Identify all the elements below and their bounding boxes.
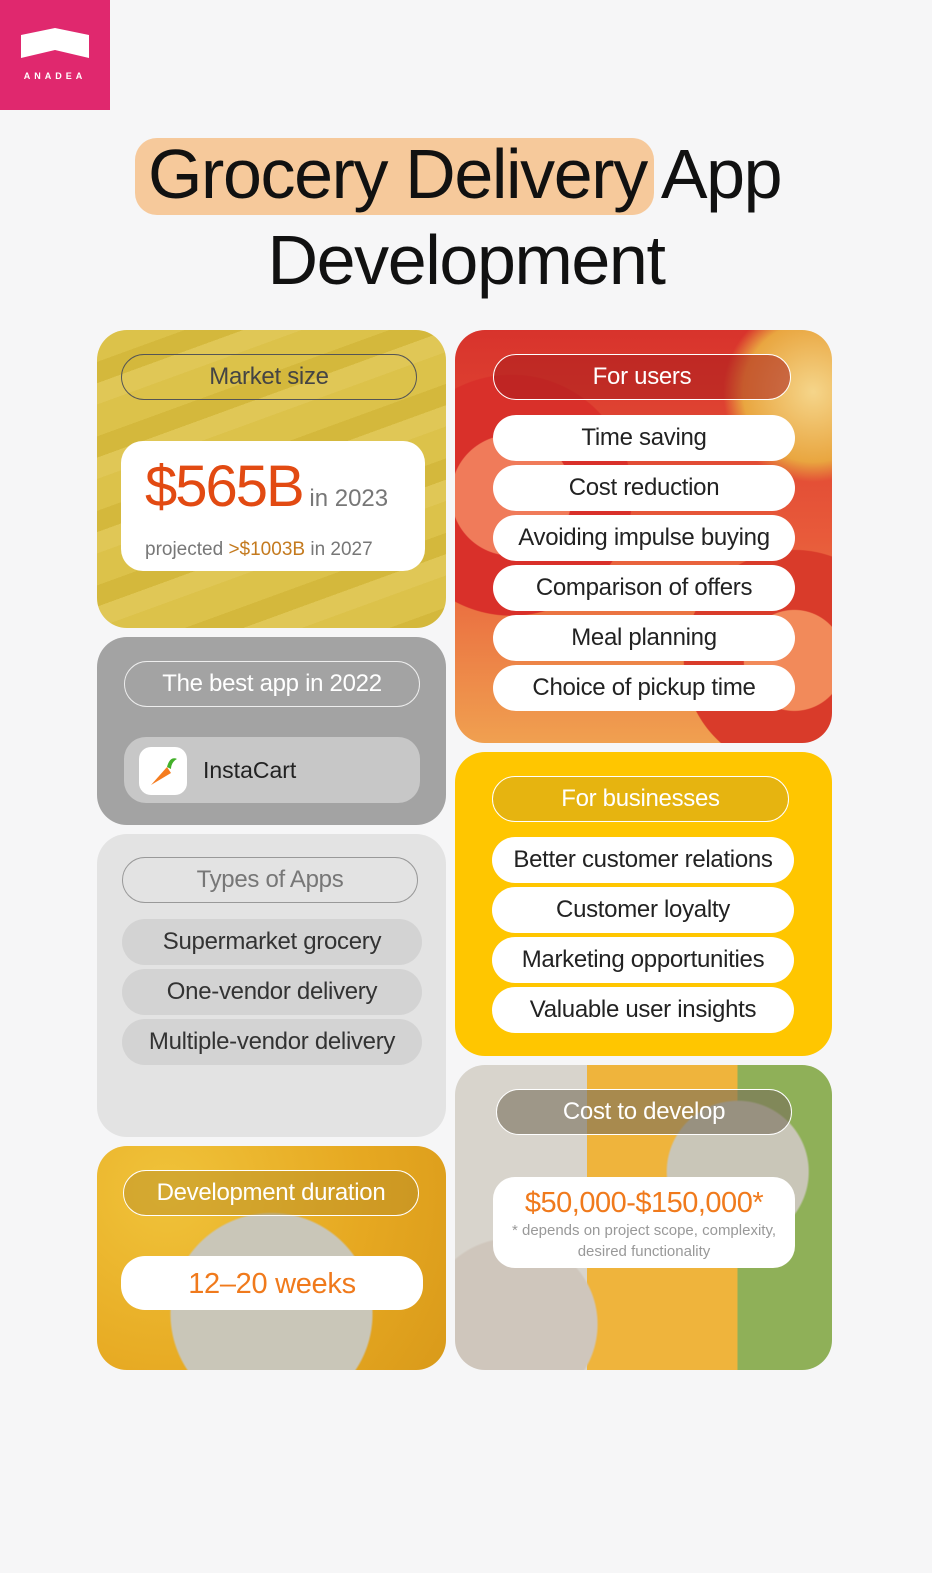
list: business benefits: Marketing opportunities	[522, 946, 764, 973]
list: types: One-vendor delivery	[167, 978, 377, 1005]
heading: types	[122, 857, 418, 903]
heading: duration	[123, 1170, 419, 1216]
list: user benefits: Avoiding impulse buying	[518, 524, 770, 551]
heading: for users	[493, 354, 791, 400]
heading: cost	[496, 1089, 792, 1135]
list: user benefits: Cost reduction	[569, 474, 719, 501]
panel: best app	[97, 637, 446, 825]
text block: weeks: 12–20 weeks	[188, 1268, 356, 1300]
heading: duration: Development duration	[157, 1179, 385, 1206]
logo: ANADEA	[24, 71, 86, 81]
logo	[0, 0, 110, 110]
text block: market value	[121, 441, 425, 571]
app: instacart: InstaCart	[203, 757, 296, 783]
text block: weeks	[121, 1256, 423, 1310]
title	[135, 135, 781, 299]
heading: cost: Cost to develop	[563, 1098, 725, 1125]
list: user benefits: Choice of pickup time	[532, 674, 756, 701]
heading: types: Types of Apps	[197, 866, 343, 893]
list: types: Multiple-vendor delivery	[149, 1028, 395, 1055]
heading: best app: The best app in 2022	[162, 670, 382, 697]
title: Development	[267, 221, 665, 299]
panel: for businesses	[455, 752, 832, 1056]
text block: cost value: * depends on project scope, complexity,	[512, 1222, 776, 1239]
text block: market value: projected >$1003B in 2027	[145, 539, 373, 560]
list: user benefits: Time saving	[581, 424, 707, 451]
list: business benefits	[492, 837, 794, 1033]
list: user benefits: Meal planning	[571, 624, 717, 651]
text block: market value: $565B in 2023	[145, 454, 388, 519]
heading: market size: Market size	[209, 363, 329, 390]
icon: carrot	[139, 747, 187, 795]
panel: development duration	[97, 1146, 446, 1370]
list: business benefits: Valuable user insights	[530, 996, 756, 1023]
app: instacart	[124, 737, 420, 803]
heading: for users: For users	[593, 363, 691, 390]
list: business benefits: Better customer relations	[513, 846, 773, 873]
list: user benefits: Comparison of offers	[536, 574, 752, 601]
title: Grocery DeliveryApp	[148, 135, 781, 213]
heading: best app	[124, 661, 420, 707]
panel: cost to develop	[455, 1065, 832, 1370]
text block: cost value: $50,000-$150,000*	[525, 1187, 763, 1219]
list: types	[122, 919, 422, 1065]
list: business benefits: Customer loyalty	[556, 896, 730, 923]
heading: businesses	[492, 776, 789, 822]
list: types: Supermarket grocery	[163, 928, 381, 955]
text block: cost value: desired functionality	[578, 1243, 710, 1260]
list: user benefits	[493, 415, 795, 711]
text block: cost value	[493, 1177, 795, 1268]
heading: businesses: For businesses	[561, 785, 720, 812]
heading: market size	[121, 354, 417, 400]
panel: for users	[455, 330, 832, 743]
panel: market size	[97, 330, 446, 628]
panel: types of apps	[97, 834, 446, 1137]
